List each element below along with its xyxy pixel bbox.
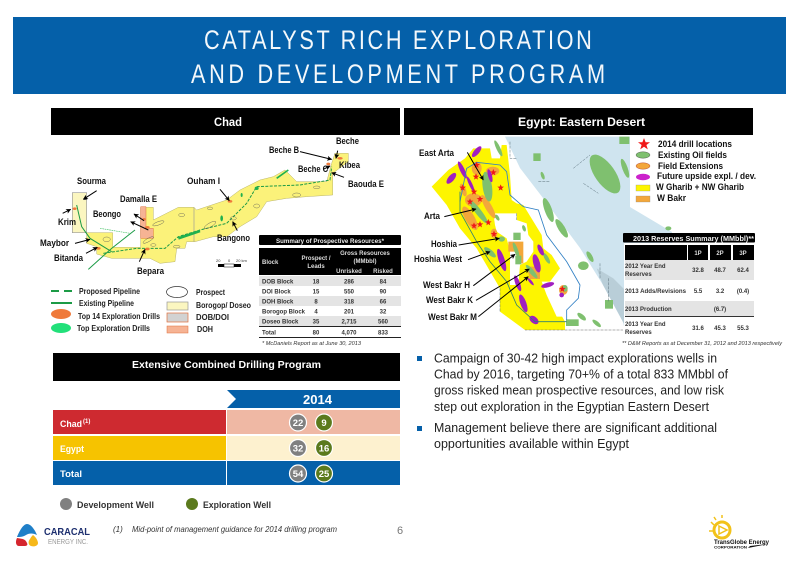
- map: Chad concession blocks: [63, 151, 348, 269]
- map labels: Egypt fields: Arta: [424, 211, 441, 222]
- title banner: CATALYST RICH EXPLORATION: [204, 26, 592, 56]
- table: 2013 reserves summary: 3P: [739, 251, 747, 257]
- heading: extensive combined drilling program: Extensive Combined Drilling Program: [132, 359, 321, 371]
- table: 2013 reserves summary: 2012 Year End: [625, 264, 666, 270]
- table row: Chad: 9: [321, 418, 327, 429]
- legend: Chad map: DOH: [197, 324, 213, 334]
- table: 2013 reserves summary: 2013 Production: [625, 307, 672, 313]
- year chevron: 2014: [227, 390, 400, 408]
- table: 2013 reserves summary: (6.7): [714, 307, 726, 313]
- table: 2013 reserves summary: ** D&M Reports as at December 31, 2012 and 2013 respectively: [622, 341, 783, 347]
- map labels: Egypt fields: East Arta: [419, 148, 455, 159]
- map labels: Chad prospects: Ouham I: [187, 176, 220, 187]
- map labels: Chad prospects: Bangono: [217, 233, 250, 244]
- map labels: Chad prospects: Beche: [336, 136, 359, 147]
- table: summary of prospective resources: 35: [313, 320, 320, 326]
- table: summary of prospective resources: 32: [380, 310, 387, 316]
- table: summary of prospective resources: 318: [344, 300, 355, 306]
- table: summary of prospective resources: 66: [380, 300, 387, 306]
- map labels: Chad prospects: Kibea: [339, 160, 361, 171]
- heading: Chad: Chad: [214, 117, 242, 129]
- table: 2013 reserves summary: 45.3: [714, 326, 726, 332]
- bullet list: campaign and opportunities: [417, 352, 729, 451]
- table: 2013 reserves summary: 5.5: [694, 289, 703, 295]
- table: summary of prospective resources: 4,070: [341, 330, 357, 336]
- table: summary of prospective resources: 2,715: [341, 320, 357, 326]
- map labels: Chad prospects: [40, 136, 384, 277]
- table: summary of prospective resources: 15: [313, 290, 320, 296]
- legend: Chad map: Prospect: [196, 287, 225, 297]
- map labels: Egypt fields: [414, 148, 477, 323]
- footnote: Mid-point of management guidance for 2014 drilling program: [132, 525, 337, 534]
- table: summary of prospective resources: Unrisked: [336, 269, 362, 275]
- bullet list: campaign and opportunities: Campaign of 30-42 high impact explorations wells in: [434, 352, 717, 366]
- year chevron: 2014: 2014: [303, 392, 333, 407]
- scale bar: 20 km: [236, 258, 248, 263]
- table: summary of prospective resources: 4: [314, 310, 318, 316]
- table: summary of prospective resources: DOI Block: [262, 290, 291, 296]
- legend: Chad map: Top 14 Exploration Drills: [78, 311, 160, 321]
- footnote: (1): [113, 525, 123, 534]
- table: summary of prospective resources: Block: [262, 260, 279, 266]
- table: summary of prospective resources: [259, 235, 401, 347]
- map labels: Chad prospects: Krim: [58, 217, 76, 228]
- scale bar: 20: [216, 258, 221, 263]
- legend: well types: Exploration Well: [203, 500, 271, 511]
- table row: Total: [53, 461, 400, 485]
- table row: Total: Total: [60, 469, 82, 480]
- heading: Chad: [51, 108, 400, 135]
- table: summary of prospective resources: Leads: [307, 264, 325, 270]
- map labels: Chad prospects: Sourma: [77, 176, 107, 187]
- table row: Egypt: 16: [319, 444, 329, 454]
- title banner: AND DEVELOPMENT PROGRAM: [191, 60, 605, 90]
- scale bar: [216, 258, 248, 267]
- table row: Total: 25: [319, 469, 330, 480]
- table: 2013 reserves summary: 62.4: [737, 268, 749, 274]
- legend: well types: [60, 498, 271, 511]
- legend: Chad map: Borogop/ Doseo: [196, 300, 251, 310]
- legend: Egypt map: 2014 drill locations: [658, 139, 732, 149]
- map labels: Chad prospects: Beche B: [269, 145, 299, 156]
- table: summary of prospective resources: Gross Resources: [340, 251, 391, 257]
- table: 2013 reserves summary: 31.6: [692, 326, 704, 332]
- table: summary of prospective resources: 80: [313, 330, 320, 336]
- table row: Total: 54: [293, 469, 304, 480]
- table: 2013 reserves summary: 2013 Year End: [625, 322, 666, 328]
- legend: Chad map: Proposed Pipeline: [79, 286, 140, 296]
- legend: Chad map: [51, 286, 251, 334]
- map labels: Chad prospects: Bepara: [137, 266, 165, 277]
- legend: Egypt map: Field Extensions: [658, 161, 723, 171]
- table: summary of prospective resources: 833: [378, 330, 389, 336]
- table row: Chad: Chad: [60, 419, 82, 430]
- bullet list: campaign and opportunities: step out exploration in the Egyptian Eastern Desert: [434, 400, 709, 414]
- table row: Chad: [53, 410, 400, 434]
- table: summary of prospective resources: * McDaniels Report as at June 30, 2013: [262, 341, 362, 347]
- scale bar: 0: [228, 258, 231, 263]
- table: summary of prospective resources: 550: [344, 290, 355, 296]
- table: summary of prospective resources: 201: [344, 310, 355, 316]
- table row: Egypt: Egypt: [60, 444, 85, 455]
- table: 2013 reserves summary: 3.2: [716, 289, 725, 295]
- bullet list: campaign and opportunities: gross risked mean prospective resources, and low risk: [434, 384, 725, 398]
- table: 2013 reserves summary: 2013 Reserves Summary (MMbbl)**: [633, 234, 754, 243]
- legend: well types: Development Well: [77, 500, 154, 511]
- table: summary of prospective resources: 8: [314, 300, 318, 306]
- bullet list: campaign and opportunities: Management believe there are significant additional: [434, 421, 717, 435]
- bullet list: campaign and opportunities: opportunities available within Egypt: [434, 437, 630, 451]
- table: summary of prospective resources: DOB Block: [262, 280, 294, 286]
- legend: Chad map: DOB/DOI: [196, 312, 229, 322]
- table: 2013 reserves summary: (0.4): [737, 289, 749, 295]
- page number: 6: [397, 525, 403, 537]
- title banner: [13, 17, 786, 94]
- map labels: Chad prospects: Baouda E: [348, 179, 384, 190]
- table: summary of prospective resources: Prospect /: [301, 256, 331, 262]
- table: summary of prospective resources: Risked: [373, 269, 393, 275]
- heading: Egypt Eastern Desert: [404, 108, 753, 135]
- table: 2013 reserves summary: 48.7: [714, 268, 726, 274]
- legend: Chad map: Existing Pipeline: [79, 298, 134, 308]
- table: summary of prospective resources: (MMbbl): [354, 259, 376, 265]
- table: summary of prospective resources: Borogop Block: [262, 310, 306, 316]
- map labels: Egypt fields: West Bakr M: [428, 312, 477, 323]
- map labels: Chad prospects: Beongo: [93, 209, 121, 220]
- map labels: Egypt fields: West Bakr K: [426, 295, 473, 306]
- table: 2013 reserves summary: 55.3: [737, 326, 749, 332]
- table row: Chad: (1): [83, 419, 90, 425]
- table: 2013 reserves summary: 1P: [694, 251, 702, 257]
- heading: extensive combined drilling program: [53, 353, 400, 381]
- map labels: Egypt fields: Hoshia: [431, 239, 458, 250]
- table: summary of prospective resources: 90: [380, 290, 387, 296]
- table: 2013 reserves summary: 2013 Adds/Revisions: [625, 289, 687, 295]
- map labels: Chad prospects: Maybor: [40, 238, 69, 249]
- table: summary of prospective resources: 286: [344, 280, 355, 286]
- map labels: Egypt fields: West Bakr H: [423, 280, 470, 291]
- table: 2013 reserves summary: 32.8: [692, 268, 704, 274]
- table: summary of prospective resources: 18: [313, 280, 320, 286]
- table: summary of prospective resources: DOH Block: [262, 300, 294, 306]
- legend: Egypt map: [630, 135, 757, 207]
- legend: Egypt map: W Bakr: [657, 193, 686, 203]
- table: summary of prospective resources: Total: [262, 330, 276, 336]
- legend: Egypt map: W Gharib + NW Gharib: [656, 182, 744, 192]
- map: Egypt Eastern Desert: [432, 137, 672, 338]
- logo: TransGlobe Energy: TransGlobe Energy: [714, 539, 769, 546]
- logo: TransGlobe Energy: [709, 515, 769, 550]
- logo: Caracal Energy: CARACAL: [44, 527, 90, 538]
- map labels: Chad prospects: Damalla E: [120, 194, 157, 205]
- legend: Egypt map: Future upside expl. / dev.: [657, 171, 756, 181]
- bullet list: campaign and opportunities: Chad by 2016, targeting 70+% of a total 833 MMbbl of: [434, 368, 729, 382]
- table row: Egypt: [53, 436, 400, 460]
- table row: Egypt: 32: [293, 444, 303, 454]
- map labels: Chad prospects: Beche C: [298, 164, 328, 175]
- logo: TransGlobe Energy: CORPORATION: [714, 546, 747, 550]
- table: summary of prospective resources: Summary of Prospective Resources*: [276, 238, 384, 245]
- table: 2013 reserves summary: [622, 233, 783, 347]
- table: summary of prospective resources: 560: [378, 320, 389, 326]
- table: 2013 reserves summary: 2P: [716, 251, 724, 257]
- table row: Chad: 22: [293, 418, 303, 429]
- map labels: Chad prospects: Bitanda: [54, 253, 84, 264]
- table: summary of prospective resources: Doseo Block: [262, 320, 299, 326]
- table: 2013 reserves summary: Reserves: [625, 330, 652, 336]
- logo: Caracal Energy: ENERGY INC.: [48, 539, 88, 546]
- logo: Caracal Energy: [16, 524, 90, 546]
- map labels: Egypt fields: Hoshia West: [414, 254, 463, 265]
- table: 2013 reserves summary: Reserves: [625, 272, 652, 278]
- table: summary of prospective resources: 84: [380, 280, 387, 286]
- heading: Egypt Eastern Desert: Egypt: Eastern Desert: [518, 117, 645, 129]
- legend: Egypt map: Existing Oil fields: [658, 150, 727, 160]
- legend: Chad map: Top Exploration Drills: [77, 323, 150, 333]
